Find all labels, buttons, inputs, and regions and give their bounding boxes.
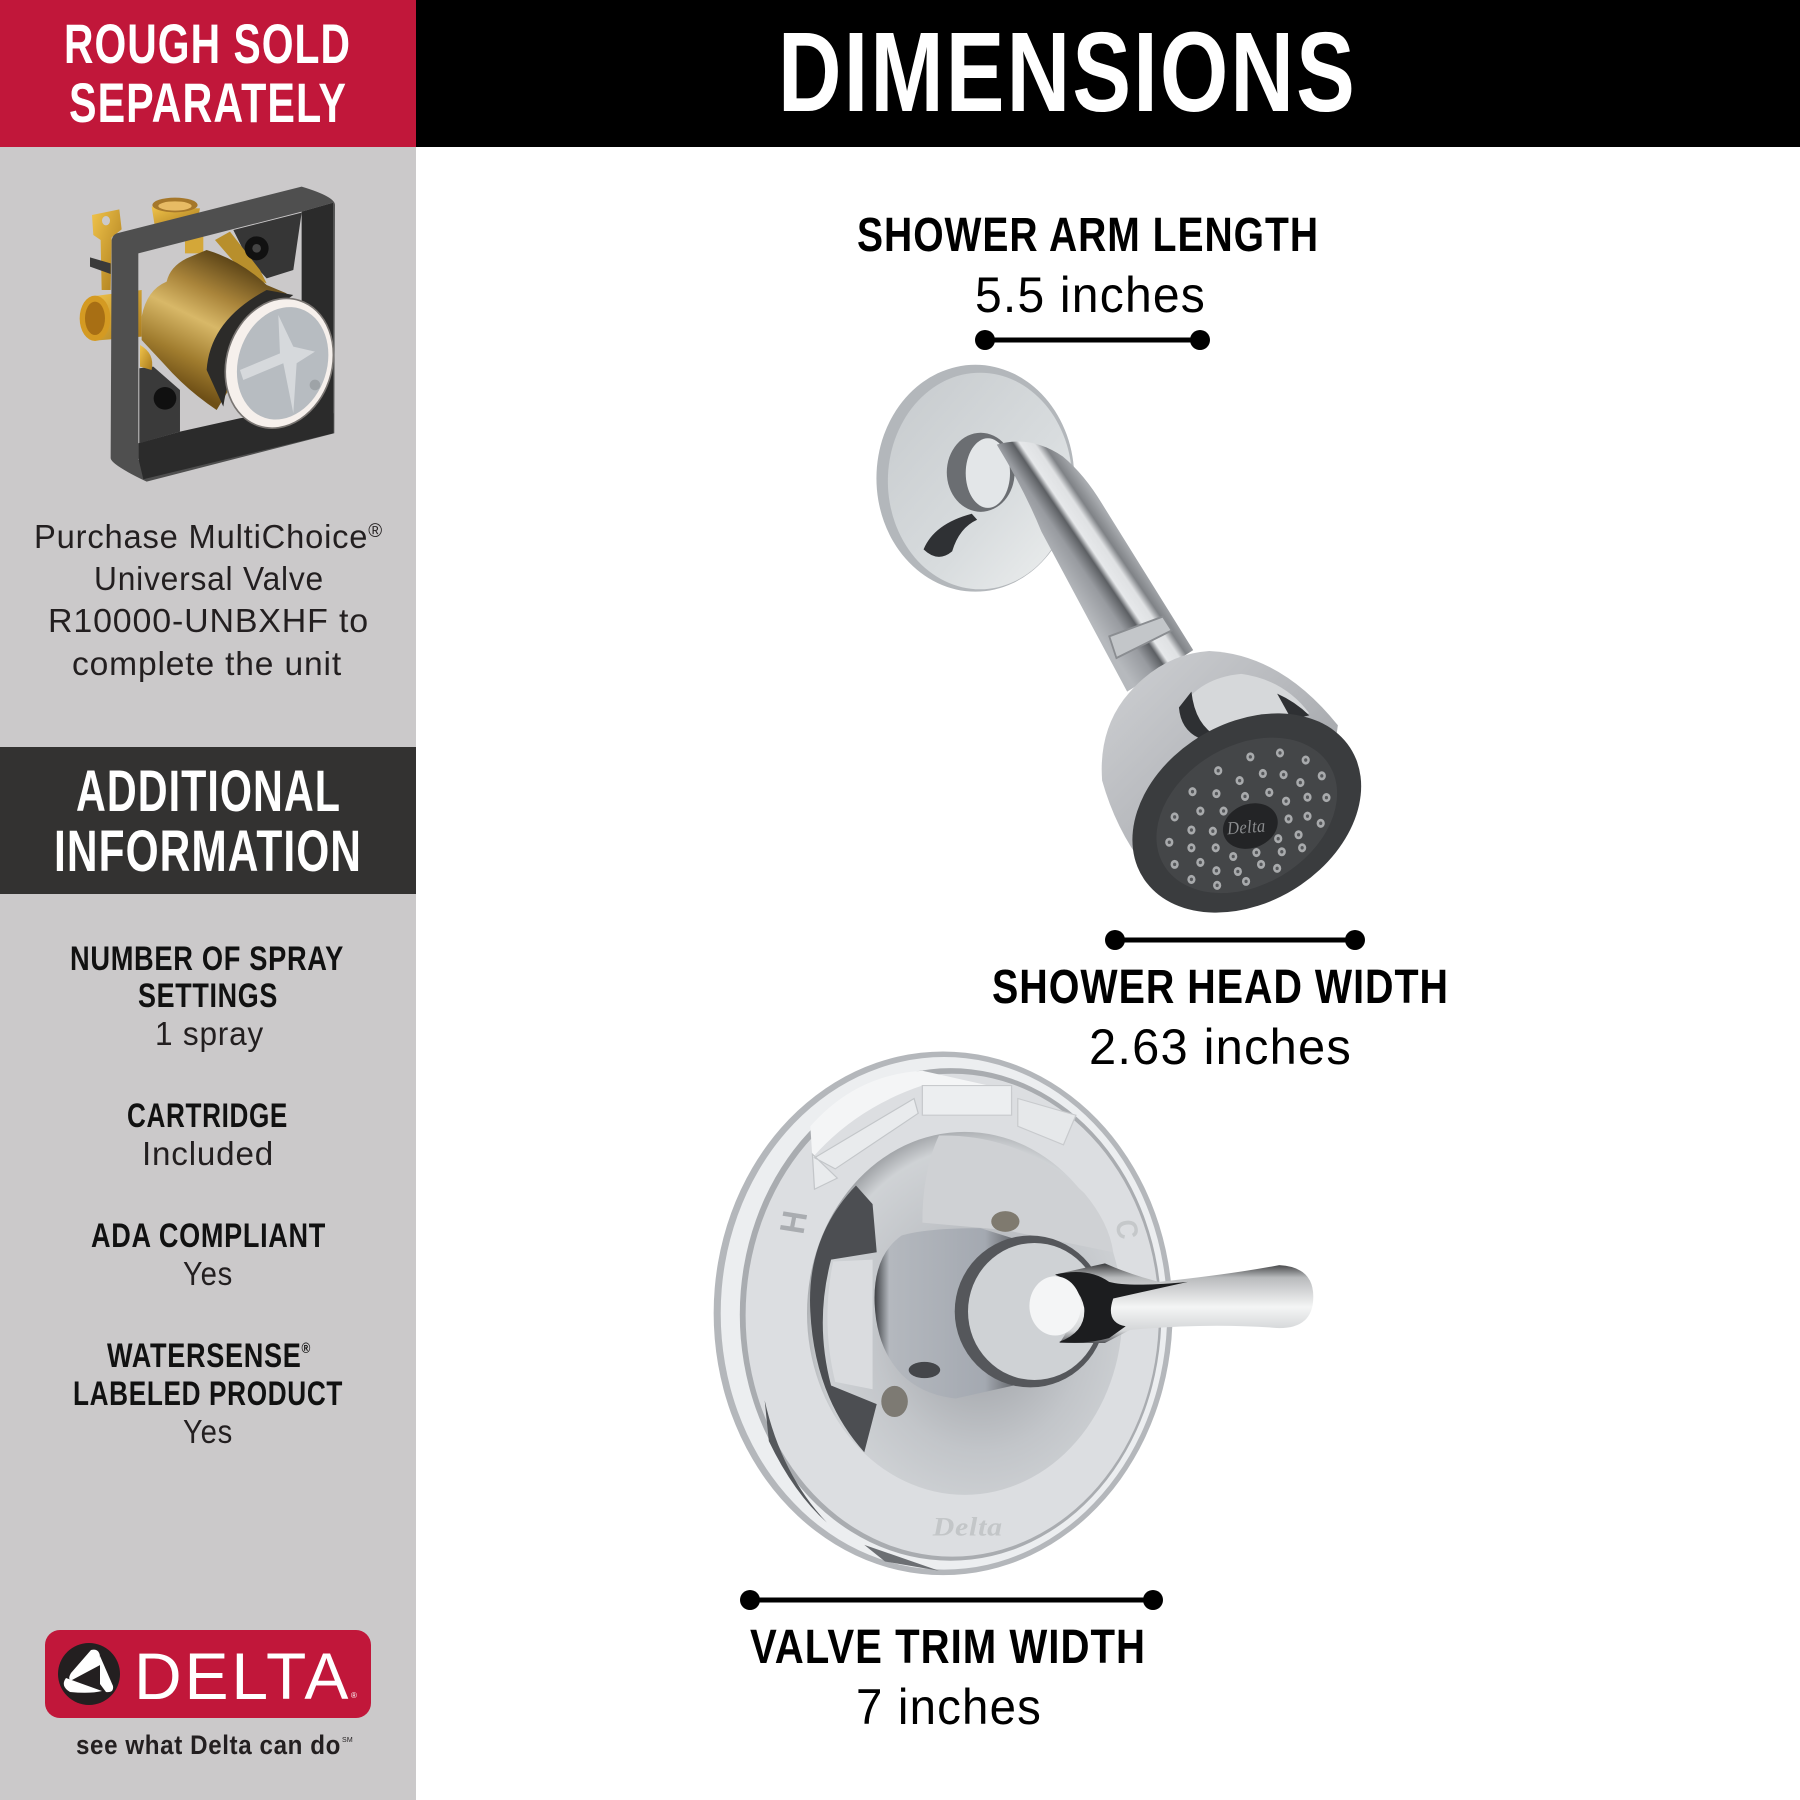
logo: delta: DELTA — [134, 1639, 350, 1713]
banner: rough sold separately: ROUGH SOLD — [64, 12, 351, 75]
logo: delta: see what Delta can do — [76, 1730, 341, 1760]
label: valve trim width — [750, 1621, 1146, 1735]
logo: delta: ® — [351, 1691, 357, 1700]
spec: ada compliant: Yes — [183, 1255, 233, 1292]
heading: additional information: ADDITIONAL — [76, 759, 341, 824]
label: valve trim width: 7 inches — [856, 1679, 1042, 1735]
dimension line: shower arm — [975, 330, 1210, 350]
label: shower head width — [992, 961, 1449, 1075]
trim plate: C — [1109, 1217, 1146, 1242]
spec: ada compliant — [91, 1217, 326, 1292]
product photo: shower arm and head — [876, 365, 1390, 951]
spec: watersense: ® — [302, 1340, 311, 1357]
spec: watersense — [73, 1337, 343, 1450]
label: shower arm length — [857, 209, 1319, 323]
dome — [807, 1132, 1122, 1495]
text: purchase note: Universal Valve — [94, 560, 324, 597]
text: purchase note: Purchase MultiChoice — [34, 518, 371, 555]
spec: watersense: Yes — [183, 1413, 233, 1450]
icon: rough-in valve product photo — [80, 187, 350, 482]
spec: ada compliant: ADA COMPLIANT — [91, 1217, 326, 1255]
head dome — [1102, 651, 1338, 887]
spec: spray settings: NUMBER OF SPRAY — [70, 940, 344, 978]
label: shower arm length: SHOWER ARM LENGTH — [857, 209, 1319, 262]
lever — [1055, 1263, 1313, 1343]
banner: rough sold separately: SEPARATELY — [69, 71, 347, 134]
banner: rough sold separately — [0, 0, 416, 147]
spec: watersense: LABELED PRODUCT — [73, 1375, 343, 1413]
frame body — [111, 187, 335, 482]
spec: cartridge — [127, 1097, 288, 1172]
spec: spray settings: 1 spray — [155, 1015, 264, 1052]
label: shower head width: 2.63 inches — [1089, 1019, 1352, 1075]
logo: delta: SM — [342, 1737, 353, 1744]
heading: additional information: INFORMATION — [54, 819, 362, 884]
trim plate — [714, 1051, 1173, 1575]
text: purchase note — [34, 518, 383, 682]
spec: spray settings — [70, 940, 344, 1052]
handle hub — [875, 1228, 1022, 1399]
valve cap — [209, 284, 350, 442]
trim plate: H — [772, 1207, 815, 1236]
spec: watersense: WATERSENSE — [107, 1337, 351, 1375]
panel: left sidebar — [0, 0, 416, 1800]
brass body — [142, 250, 287, 410]
text: purchase note: complete the unit — [72, 645, 342, 682]
title: dimensions — [416, 0, 1800, 147]
spray face: Delta — [1226, 816, 1266, 839]
product photo: valve trim and lever — [714, 1051, 1313, 1575]
text: purchase note: ® — [368, 521, 383, 542]
label: shower head width: SHOWER HEAD WIDTH — [992, 961, 1449, 1014]
heading: additional information — [0, 747, 416, 894]
label: valve trim width: VALVE TRIM WIDTH — [750, 1621, 1146, 1674]
dimension line: shower head — [1105, 930, 1365, 950]
dimension line: valve trim — [740, 1590, 1163, 1610]
text: purchase note: R10000-UNBXHF to — [48, 602, 369, 639]
label: shower arm length: 5.5 inches — [975, 267, 1206, 323]
logo: delta — [45, 1630, 371, 1760]
wall flange — [876, 365, 1074, 592]
spray face — [1104, 675, 1390, 951]
spec: spray settings: SETTINGS — [138, 977, 278, 1015]
trim plate: Delta — [932, 1513, 1003, 1542]
arm — [997, 442, 1193, 692]
spec: cartridge: CARTRIDGE — [127, 1097, 288, 1135]
title: dimensions: DIMENSIONS — [778, 9, 1357, 135]
spec: cartridge: Included — [142, 1135, 274, 1172]
